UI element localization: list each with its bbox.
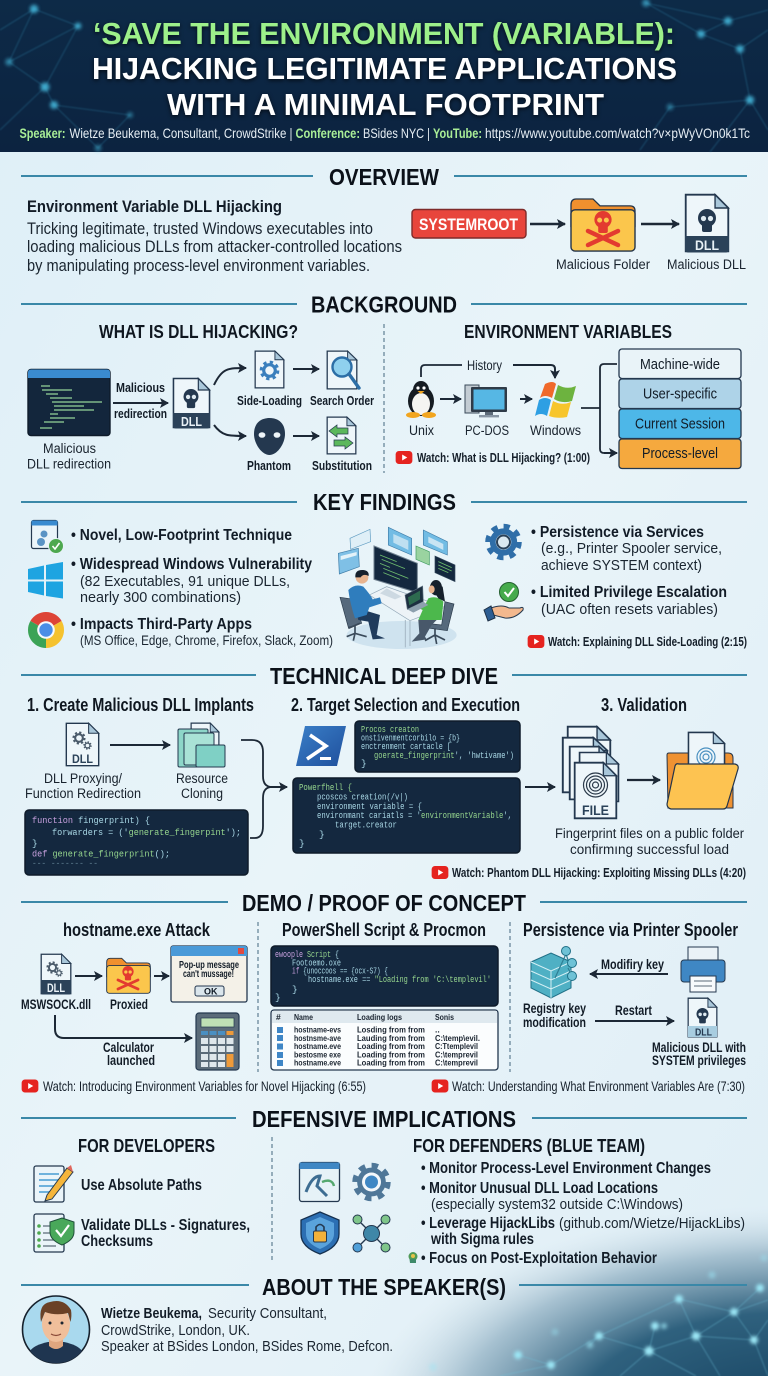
demo labels: MSWSOCK.dll [21, 997, 91, 1012]
speaker line: BSides NYC | [363, 125, 430, 141]
table: procmon log: hostname-evs [294, 1024, 341, 1034]
demo labels: Proxied [110, 997, 148, 1012]
code panel: powershell: target.creator [335, 820, 397, 830]
header banner [0, 0, 768, 152]
icon: mswsock dll [41, 954, 71, 995]
overview text [27, 197, 402, 275]
advice: validate dlls: Validate DLLs - Signatures, [81, 1217, 250, 1234]
finding: persistence [531, 524, 722, 574]
icon: fingerprint files [563, 727, 618, 818]
background heading: BACKGROUND [311, 292, 457, 318]
registry label [523, 1001, 586, 1030]
icon: phantom mask [254, 418, 285, 455]
panel: background [21, 292, 747, 473]
defender bullet list [421, 1160, 745, 1267]
code panel: fingerprint [25, 810, 248, 875]
bracket connector [581, 364, 617, 453]
timeline labels: Unix [409, 423, 434, 438]
bracket connector [241, 740, 287, 838]
scope: machine-wide: Machine-wide [640, 357, 720, 373]
icon: network nodes [353, 1215, 390, 1252]
overview text: by manipulating process-level environment variables. [27, 257, 370, 275]
icon: dll file [173, 378, 210, 429]
arrow [627, 779, 660, 781]
arrow [520, 398, 532, 400]
icon: fingerprint files: FILE [582, 802, 609, 818]
code panel: powershell: pcoscos creation(/v|) [317, 792, 408, 802]
arrow [525, 786, 555, 788]
speaker line: Conference: [296, 125, 360, 141]
scope: process-level: Process-level [642, 446, 718, 462]
code panel: powershell: environment variable = { [317, 801, 422, 812]
panel: about the speaker [21, 1274, 747, 1363]
restart arrow: Restart [615, 1002, 652, 1018]
table: procmon log: C:\temprevil [435, 1050, 478, 1060]
arrow: malicious redirection: Malicious [116, 380, 165, 395]
icon: service gear [488, 526, 519, 558]
step 1 labels: Function Redirection [25, 786, 141, 801]
icon: malicious dll [685, 195, 729, 253]
defender bullet list: (github.com/Wietze/HijackLibs) [559, 1216, 745, 1232]
icon: mswsock dll: DLL [47, 983, 65, 995]
finding: third-party apps: • Impacts Third-Party Apps [71, 616, 252, 633]
overview text: Environment Variable DLL Hijacking [27, 197, 282, 216]
step 1 labels: Cloning [181, 786, 223, 801]
table: procmon log: .. [435, 1024, 440, 1034]
table: procmon log: Lauding from from [357, 1033, 425, 1043]
code panel: fingerprint: forwarders = ('generate_fingerpint'); [52, 827, 241, 838]
table: procmon log: C:Ttemplevil [435, 1041, 478, 1051]
step 1 labels [25, 771, 228, 801]
finding: privilege escalation [531, 584, 727, 618]
icon: windows flag [535, 382, 576, 418]
side-loading and search order labels [237, 393, 374, 408]
code panel: fingerprint: def generate_fingerprint(); [32, 848, 170, 860]
finding: novel technique: • Novel, Low-Footprint Technique [71, 527, 292, 544]
table: procmon log [271, 1010, 498, 1070]
finding: third-party apps [71, 616, 333, 648]
icon: folder with fingerprint file [667, 732, 738, 809]
subheading: powershell and procmon: PowerShell Script & Procmon [282, 920, 486, 940]
table: procmon log: hostname.eve [294, 1041, 341, 1051]
code panel: fingerprint: --- ------- -- [32, 858, 98, 869]
arrow [440, 398, 461, 400]
icon: registry cube [531, 946, 576, 998]
icon labels [556, 257, 746, 272]
table: procmon log: Loading logs [357, 1012, 402, 1022]
speaker line: Wietze Beukema, Consultant, CrowdStrike | [70, 125, 292, 141]
finding: windows vulnerability [71, 556, 312, 606]
popup window: OK [204, 986, 218, 996]
code window label: DLL redirection [27, 456, 111, 472]
code panel: powershell: environmant cariatls = 'environmentVariable', [317, 810, 512, 821]
icon: hand with check [484, 582, 523, 621]
title: WITH A MINIMAL FOOTPRINT [167, 87, 604, 122]
modify key arrow: Modifiry key [601, 956, 664, 972]
code panel: process creation: enctrenment cartacle [ [361, 741, 451, 752]
icon: dll proxying: DLL [72, 754, 93, 766]
title [92, 16, 677, 122]
finding: privilege escalation: • Limited Privilege Escalation [531, 584, 727, 601]
phantom and substitution labels: Phantom [247, 458, 291, 473]
modify key arrow [590, 956, 668, 974]
timeline labels: PC-DOS [465, 423, 509, 438]
icon: code window [28, 370, 110, 436]
subheading: developers: FOR DEVELOPERS [78, 1136, 215, 1156]
icon labels: Malicious DLL [667, 257, 746, 272]
table: procmon log: bestosme exe [294, 1050, 341, 1060]
illustration: analysts at desk [338, 527, 457, 649]
defender bullet list: (especially system32 outside C:\Windows) [431, 1197, 683, 1213]
icon: calculator [196, 1013, 239, 1070]
icon labels: Malicious Folder [556, 257, 650, 272]
panel: defensive implications [21, 1106, 747, 1267]
arrow: malicious redirection: redirection [114, 406, 167, 421]
key findings heading: KEY FINDINGS [313, 489, 456, 515]
icon: side-loading [255, 351, 284, 388]
arrow: to calculator [55, 1015, 192, 1038]
popup window [171, 946, 247, 1002]
finding: third-party apps: (MS Office, Edge, Chrome, Firefox, Slack, Zoom) [80, 633, 333, 648]
technical deep dive heading: TECHNICAL DEEP DIVE [270, 663, 498, 689]
code panel: script: } [292, 984, 298, 995]
finding: windows vulnerability: • Widespread Windows Vulnerability [71, 556, 312, 573]
table: procmon log: Sonis [435, 1012, 454, 1022]
speaker bio: Wietze Beukema, [101, 1306, 202, 1322]
code panel: process creation: } [361, 758, 367, 769]
registry label: modification [523, 1015, 586, 1030]
icon: malicious dll: DLL [695, 238, 719, 253]
subheading: hostname attack: hostname.exe Attack [63, 920, 211, 940]
calculator label: Calculator [103, 1040, 155, 1055]
icon: system dll: DLL [695, 1026, 712, 1038]
scope: current session: Current Session [635, 416, 725, 432]
code panel: process creation: onstivenmentcorbilo = {b} [361, 732, 460, 744]
arrow [293, 435, 319, 437]
step 2 heading: 2. Target Selection and Execution [291, 695, 520, 715]
finding: persistence: • Persistence via Services [531, 524, 704, 541]
icon: dll proxying [66, 723, 99, 766]
arrow [641, 223, 679, 225]
phantom and substitution labels [247, 458, 372, 473]
code panel: process creation: Procos creaton [361, 724, 419, 735]
calculator label: launched [107, 1053, 155, 1068]
icon: checklist shield [34, 1214, 74, 1252]
code panel: powershell: } [299, 838, 305, 849]
code panel: process creation: goerate_fingerprint', 'hwtivame') [374, 750, 514, 761]
icon: monitoring gear [355, 1166, 388, 1198]
step 1 labels: Resource [176, 771, 228, 786]
code panel: script: Footoemo.oxe [292, 958, 341, 968]
environment variable scopes [619, 349, 741, 468]
phantom and substitution labels: Substitution [312, 458, 372, 473]
arrow [154, 975, 169, 977]
code panel: powershell: Powerfhell { [299, 782, 352, 793]
restart arrow [595, 1002, 674, 1021]
side-loading and search order labels: Side-Loading [237, 393, 302, 408]
panel: overview [21, 164, 747, 275]
code panel: powershell: } [319, 829, 325, 840]
table: procmon log: Loading from from [357, 1058, 425, 1068]
title: ‘SAVE THE ENVIRONMENT (VARIABLE): [93, 16, 675, 51]
history timeline [421, 358, 555, 378]
icon: resource cloning [178, 723, 225, 767]
icon: malicious folder [571, 199, 635, 251]
arrow [530, 223, 565, 225]
overview text: Tricking legitimate, trusted Windows executables into [27, 220, 373, 238]
panel: demo / proof of concept [21, 890, 747, 1094]
speaker line: YouTube: [433, 125, 482, 141]
table: procmon log: Name [294, 1012, 313, 1022]
code panel: process creation [355, 721, 520, 772]
advice: validate dlls: Checksums [81, 1233, 153, 1250]
defender bullet list: • Monitor Unusual DLL Load Locations [421, 1180, 658, 1197]
icon: proxied folder [107, 958, 150, 993]
icon: pc-dos computer [465, 385, 507, 417]
step 1 heading: 1. Create Malicious DLL Implants [27, 695, 254, 715]
speaker bio: Security Consultant, [208, 1306, 327, 1322]
panel: key findings [21, 489, 747, 649]
code panel: fingerprint: function fingerprint) { [32, 815, 150, 826]
overview heading: OVERVIEW [329, 164, 439, 190]
timeline labels [409, 423, 581, 438]
code window label: Malicious [43, 441, 96, 456]
table: procmon log: hostnsme-ave [294, 1033, 341, 1043]
side-loading and search order labels: Search Order [310, 393, 374, 408]
icon: substitution [327, 417, 356, 454]
speaker line [20, 125, 750, 141]
finding: persistence: achieve SYSTEM context) [541, 557, 702, 574]
icon: process window [300, 1162, 340, 1202]
code panel: script: if {unoccoos == {ocx-S7) { [292, 966, 388, 976]
table: procmon log: C:\temprevil [435, 1058, 478, 1068]
speaker avatar [22, 1296, 90, 1363]
about heading: ABOUT THE SPEAKER(S) [262, 1274, 506, 1300]
subheading: environment variables: ENVIRONMENT VARIABLES [464, 322, 672, 342]
timeline labels: Windows [530, 423, 581, 438]
code window label [27, 441, 111, 472]
calculator label [103, 1040, 155, 1068]
code panel: script [271, 946, 498, 1006]
validation caption: Fingerprint files on a public folder [555, 826, 744, 841]
youtube watch link: Watch: Introducing Environment Variables for Novel Hijacking (6:55) [43, 1078, 366, 1094]
system dll label [652, 1040, 746, 1068]
defensive heading: DEFENSIVE IMPLICATIONS [252, 1106, 516, 1132]
defender bullet list: • Leverage HijackLibs [421, 1215, 555, 1232]
popup window: Pop-up message [179, 960, 239, 971]
finding: privilege escalation: (UAC often resets variables) [541, 601, 718, 618]
code panel: script: } [275, 992, 281, 1003]
finding: persistence: (e.g., Printer Spooler service, [541, 540, 722, 557]
demo heading: DEMO / PROOF OF CONCEPT [242, 890, 526, 916]
speaker bio: Speaker at BSides London, BSides Rome, Defcon. [101, 1339, 393, 1355]
systemroot label: SYSTEMROOT [419, 215, 519, 234]
defender bullet list: with Sigma rules [430, 1231, 534, 1248]
table: procmon log: Losding from from [357, 1024, 425, 1034]
defender bullet list: • Monitor Process-Level Environment Changes [421, 1160, 711, 1177]
table: procmon log: hostname.eve [294, 1058, 341, 1068]
finding: windows vulnerability: (82 Executables, 91 unique DLLs, [80, 573, 290, 590]
bottom-right network decoration [350, 1195, 768, 1376]
step 1 labels: DLL Proxying/ [44, 771, 122, 786]
icon: tux [406, 381, 436, 418]
overview text: loading malicious DLLs from attacker-controlled locations [27, 238, 402, 256]
icon: windows logo [28, 562, 63, 598]
icon: chrome [28, 612, 64, 648]
history timeline: History [467, 358, 502, 373]
code panel: powershell [293, 778, 520, 853]
panel: technical deep dive [21, 663, 747, 880]
code panel: script: ewoople Script { [275, 949, 339, 960]
subheading: defenders: FOR DEFENDERS (BLUE TEAM) [413, 1136, 645, 1156]
arrow [75, 975, 102, 977]
icon: printer [681, 947, 725, 992]
icon: shield lock [301, 1212, 339, 1254]
arrow [293, 368, 319, 370]
popup window: can't mussage! [183, 969, 234, 980]
youtube watch link: Watch: What is DLL Hijacking? (1:00) [417, 451, 590, 465]
table: procmon log: Loading from from [357, 1050, 425, 1060]
advice: absolute paths: Use Absolute Paths [81, 1177, 202, 1194]
icon: note with pencil [34, 1165, 73, 1202]
validation caption [555, 826, 744, 857]
scope: user-specific: User-specific [643, 386, 717, 402]
speaker line: Speaker: [20, 125, 66, 141]
speaker bio: CrowdStrike, London, UK. [101, 1323, 250, 1339]
code panel: fingerprint: } [32, 838, 38, 849]
defender bullet list: • Focus on Post-Exploitation Behavior [421, 1250, 657, 1267]
icon: system dll [688, 998, 717, 1038]
icon: dll file: DLL [181, 415, 202, 429]
arrows: hijack types [214, 368, 246, 436]
validation caption: confirmıng successful load [570, 842, 729, 857]
registry label: Registry key [523, 1001, 586, 1016]
code panel: script: hostname.exe == "Loading from 'C:\templevil' [308, 974, 491, 985]
table: procmon log: C:\temp\evil. [435, 1033, 480, 1043]
finding: windows vulnerability: nearly 300 combinations) [80, 589, 241, 606]
title: HIJACKING LEGITIMATE APPLICATIONS [92, 51, 677, 86]
icon: search order [327, 351, 359, 389]
step 3 heading: 3. Validation [601, 695, 687, 715]
systemroot label [412, 210, 526, 238]
icon: browser with check [32, 520, 64, 554]
arrow [110, 744, 170, 746]
table: procmon log: Loading from from [357, 1041, 425, 1051]
icon: powershell [296, 726, 346, 766]
subheading: what is dll hijacking: WHAT IS DLL HIJACKING? [99, 322, 298, 342]
icon: small badge [408, 1252, 418, 1263]
table: procmon log: # [276, 1012, 281, 1022]
speaker bio [101, 1306, 393, 1355]
advice: validate dlls [81, 1217, 250, 1250]
arrow: malicious redirection [113, 380, 168, 421]
